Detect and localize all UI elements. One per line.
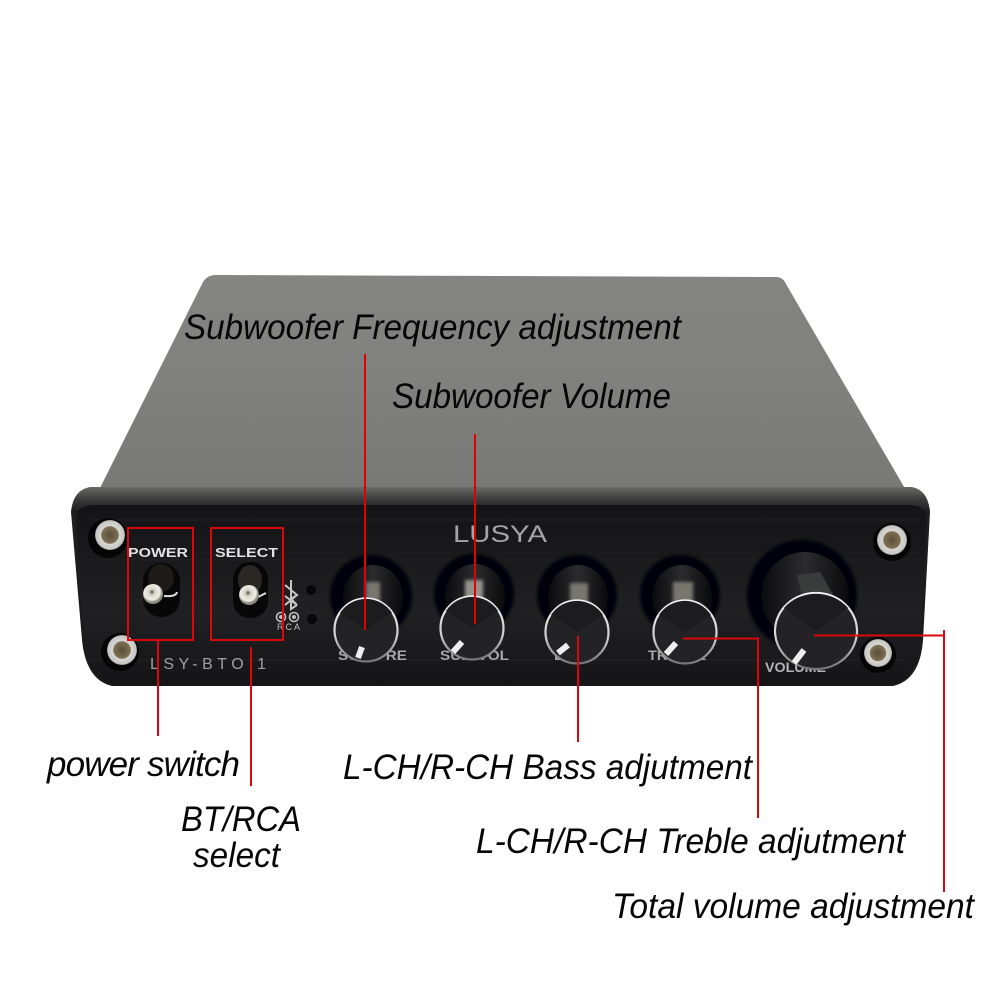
label: BT/RCA select: BT/RCA [181,800,301,839]
callout box: power switch [128,528,193,640]
knob: treble: TREBLE [648,647,706,663]
knob: bass: BASS [554,647,597,663]
knob: sub pre [330,555,412,663]
screw: bottom right [860,637,896,673]
label: BT/RCA select [181,800,301,875]
label: power switch: power switch [46,745,240,784]
power label: POWER [128,545,189,560]
leader line: subwoofer volume [474,434,476,624]
label: BT/RCA select: select [193,836,281,875]
leader line: bass [577,636,579,742]
model name: LSY-BTO 1 [150,656,266,673]
screw: top left [88,518,128,558]
leader line: treble [683,638,758,818]
label: subwoofer volume: Subwoofer Volume [392,377,671,416]
label: bass: L-CH/R-CH Bass adjutment [343,748,753,787]
knob: bass [537,555,617,664]
screw: top right [873,523,911,561]
amplifier top cover [98,275,907,492]
RCA label: RCA [277,622,300,632]
icon: RCA jacks [276,612,298,622]
leader line: power switch [157,640,159,736]
leader line: volume [814,630,944,892]
indicator LEDs [306,585,317,624]
knob: treble [640,555,720,664]
power toggle switch [143,563,180,617]
knob: sub vol: SUB-VOL [440,647,509,663]
brand name: LUSYA [453,521,547,548]
screw: bottom left [101,633,139,671]
knob: sub pre: SUB-PRE [338,647,407,663]
label: treble: L-CH/R-CH Treble adjutment [476,822,906,861]
icon: bluetooth [285,580,297,609]
knob: volume [747,540,857,675]
knob: volume: VOLUME [765,659,826,675]
leader line: subwoofer frequency [364,354,366,630]
amplifier front panel [71,487,930,686]
callout box: select switch [211,528,283,640]
knob: sub vol [434,554,514,663]
label: total volume: Total volume adjustment [612,887,975,926]
leader line: select switch [250,647,252,786]
label: subwoofer frequency: Subwoofer Frequency adjustment [184,308,682,347]
select label: SELECT [215,545,278,560]
select toggle switch [233,562,268,618]
